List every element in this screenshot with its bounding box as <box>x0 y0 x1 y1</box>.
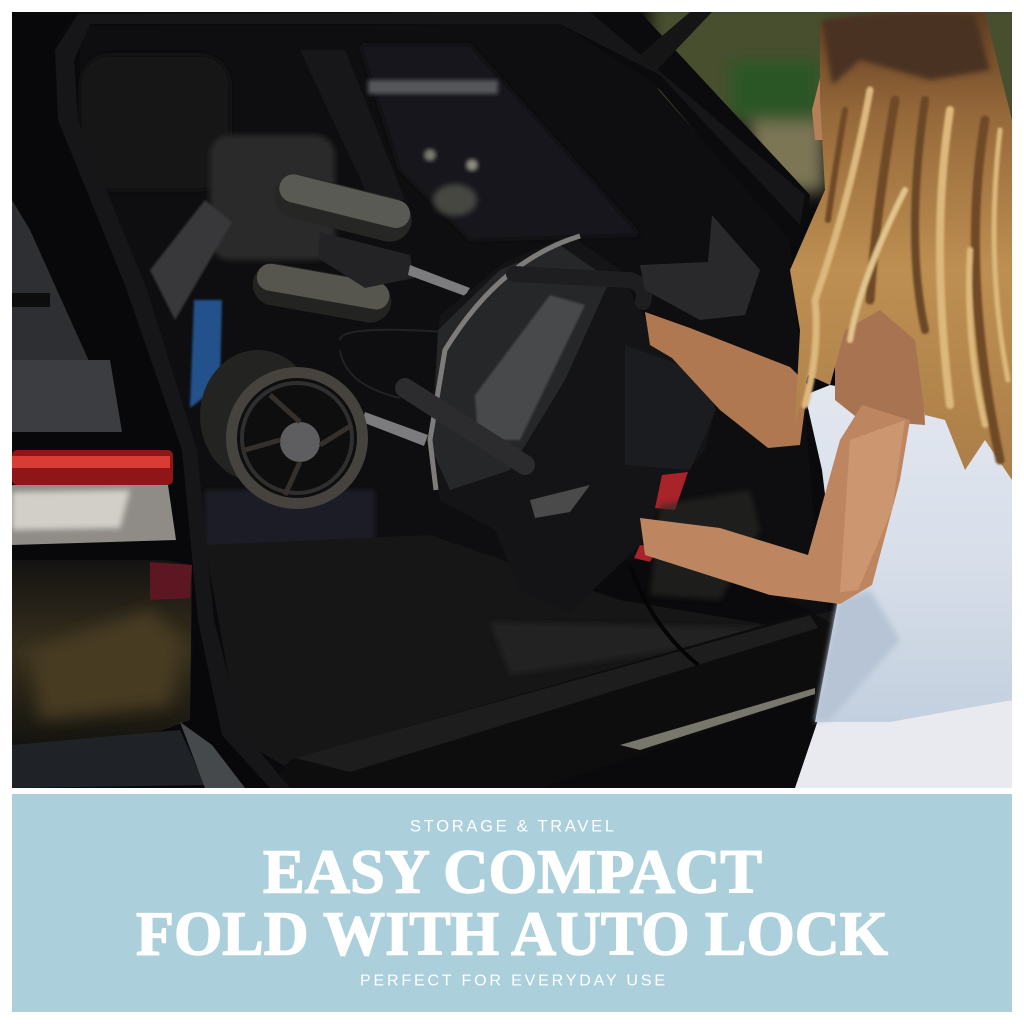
background greenery <box>650 0 1024 192</box>
trunk floor carpet <box>205 535 835 775</box>
tail light <box>12 450 176 545</box>
white top <box>805 385 1012 722</box>
woman <box>640 11 1012 788</box>
frame tubes <box>408 265 470 296</box>
face <box>812 78 822 140</box>
roof and tailgate edge <box>641 14 810 202</box>
trunk interior <box>80 43 753 545</box>
canopy bracket <box>640 215 760 320</box>
top wheel <box>279 174 412 242</box>
forearm and elbow <box>640 405 910 604</box>
second wheel <box>252 264 392 322</box>
headline: FOLD WITH AUTO LOCK <box>136 900 888 968</box>
shoulder skin <box>835 300 925 425</box>
headline: EASY COMPACT <box>263 838 762 906</box>
tailgate strut <box>640 12 712 72</box>
rear wheel front <box>226 367 368 509</box>
headline <box>136 838 888 968</box>
rear wheel back <box>200 350 296 478</box>
car body left <box>12 12 805 788</box>
handle bar top <box>514 274 644 302</box>
bumper reflection <box>12 560 245 788</box>
bumper sill <box>286 615 830 774</box>
banner panel <box>12 794 1012 1012</box>
eyebrow text: STORAGE & TRAVEL <box>410 818 614 836</box>
upper arm and hand <box>645 312 808 448</box>
red accent <box>655 472 688 510</box>
tagline: PERFECT FOR EVERYDAY USE <box>360 972 665 990</box>
stroller wheels <box>200 170 470 509</box>
skirt <box>795 700 1012 788</box>
folded stroller body <box>405 215 760 665</box>
handle bar lower <box>405 388 525 465</box>
axle bracket <box>321 236 414 288</box>
hair <box>790 11 1012 480</box>
photo: woman loading folded stroller into car trunk <box>12 0 1024 788</box>
